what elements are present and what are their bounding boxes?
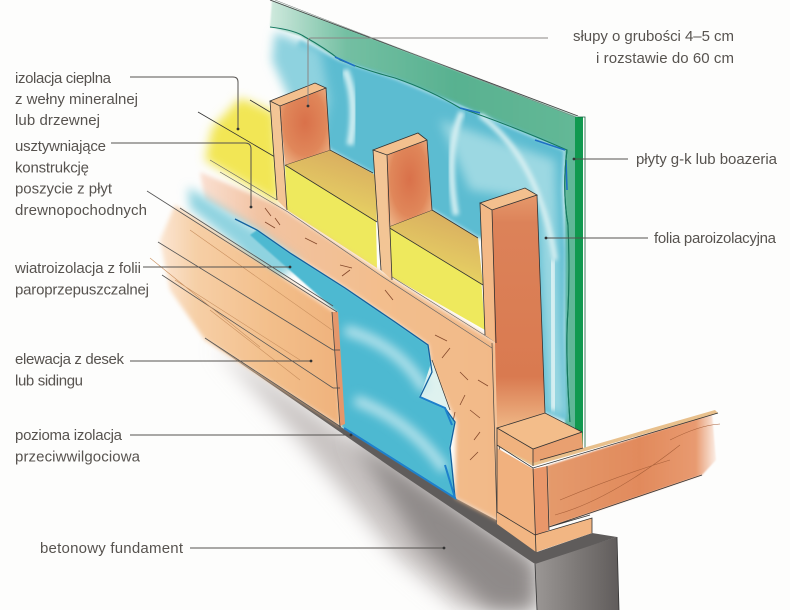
green wall board [270,0,578,430]
label: siding: lub sidingu [15,372,83,390]
sheathing board [200,160,501,522]
post 3 [480,188,545,428]
post 1 [270,83,330,210]
label: studs: słupy o grubości 4–5 cm [573,28,734,45]
label: concrete foundation: betonowy fundament [40,540,184,557]
leader lines [111,38,648,548]
wooden siding [147,191,345,427]
label: thermal insulation: lub drzewnej [15,112,100,129]
post 2 [373,133,432,280]
label: vapour barrier: folia paroizolacyjna [654,230,777,247]
label: boards: płyty g-k lub boazeria [636,151,778,168]
leader dots [237,105,575,549]
stud posts [270,83,545,428]
vapour barrier foil [270,27,570,422]
label: wind barrier: paroprzepuszczalnej [15,282,149,298]
label: damp proofing: przeciwwilgociowa [15,448,141,466]
green board edge [565,117,585,448]
mineral wool insulation [198,98,485,330]
label: thermal insulation: z wełny mineralnej [15,91,138,108]
label: sheathing: drewnopochodnych [15,202,147,219]
label: damp proofing: pozioma izolacja [15,427,123,444]
label: thermal insulation: izolacja cieplna [15,70,112,87]
wind barrier foil [188,187,455,498]
sill and floor joist [497,410,720,552]
label: siding: elewacja z desek [15,351,124,368]
label: sheathing: usztywniające [15,138,106,155]
concrete foundation [204,338,619,610]
label: studs: i rozstawie do 60 cm [596,50,734,67]
label: wind barrier: wiatroizolacja z folii [14,260,141,277]
label: sheathing: konstrukcję [15,159,89,176]
label: sheathing: poszycie z płyt [15,181,113,198]
